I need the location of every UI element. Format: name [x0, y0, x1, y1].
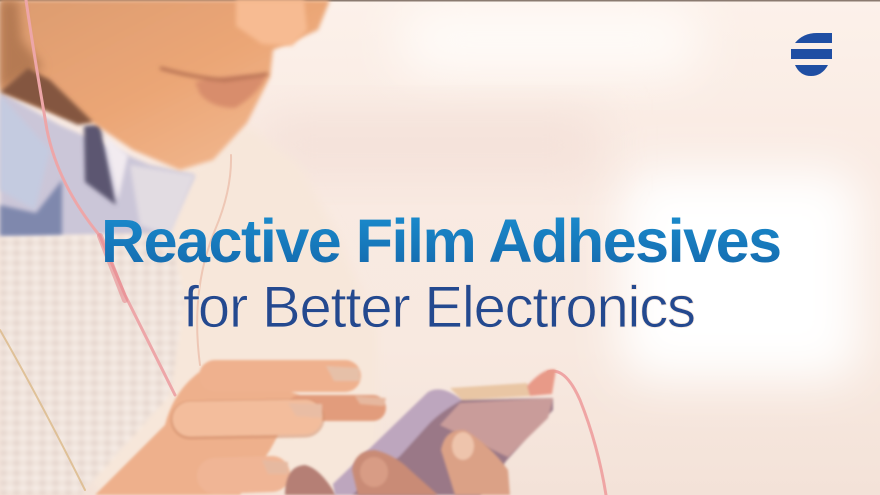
photo: fingers holding phone: [352, 430, 510, 495]
phone: [333, 369, 556, 495]
title: [101, 207, 782, 340]
mouth: [160, 68, 268, 108]
nose: [236, 0, 307, 46]
photo: sweater and shirt: [0, 92, 378, 495]
photo: hand on phone: [95, 365, 386, 495]
earphone cable: [0, 0, 606, 495]
title: Reactive Film Adhesives: [101, 207, 782, 275]
photo: face: [0, 0, 330, 170]
logo: [791, 33, 832, 76]
subtitle: for Better Electronics: [183, 275, 696, 340]
